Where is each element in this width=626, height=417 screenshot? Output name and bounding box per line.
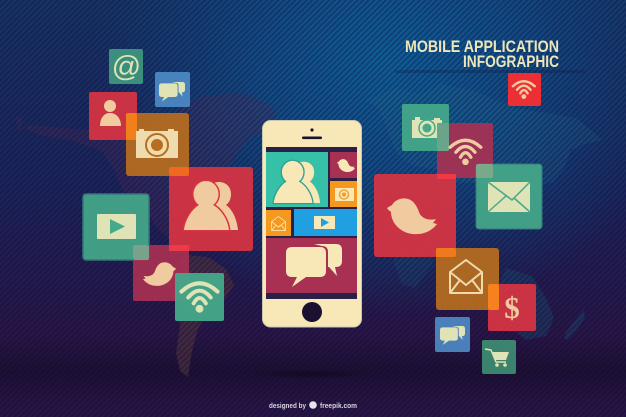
screen tile: mail (266, 210, 291, 236)
screen tile: contacts (266, 152, 328, 207)
icon: people tile (red) (169, 167, 253, 251)
phone floor shadow (252, 369, 372, 379)
screen tile: chat (266, 238, 357, 293)
icon: at sign tile: @ (111, 51, 141, 83)
icon: wifi tile (left) (175, 273, 224, 321)
icon: chat tile (bottom) (435, 317, 470, 352)
footer credit: designed by (269, 403, 306, 410)
phone home button (302, 302, 322, 322)
icon: open mail tile (orange) (436, 248, 499, 310)
footer credit: freepik.com (320, 401, 357, 410)
screen tile: camera (330, 181, 357, 207)
phone body (262, 120, 362, 327)
phone (262, 120, 362, 327)
title (395, 38, 585, 73)
icon: wifi tile (top red) (508, 73, 541, 106)
screen tile: video (294, 209, 357, 236)
icon: video tile (83, 194, 149, 260)
phone earpiece and camera (302, 128, 322, 139)
icon: person tile (89, 92, 137, 140)
icon: dollar tile: $ (504, 290, 520, 325)
world map (16, 84, 603, 377)
icon: bird tile (maroon) (133, 245, 189, 301)
icon: cart tile (482, 340, 516, 374)
icon: wifi tile (maroon) (437, 123, 493, 178)
screen tile: bird (330, 152, 357, 178)
title: INFOGRAPHIC (463, 53, 559, 71)
icon: camera tile (green) (402, 104, 449, 151)
icon: dollar tile (488, 284, 536, 331)
title: MOBILE APPLICATION (405, 38, 559, 56)
phone screen (266, 147, 357, 299)
icon: envelope tile (476, 164, 542, 229)
footer credit (269, 401, 357, 410)
icon: camera tile (orange) (126, 113, 189, 176)
icon: bird tile (red) (374, 174, 456, 257)
icon: chat tile (top left) (155, 72, 190, 107)
